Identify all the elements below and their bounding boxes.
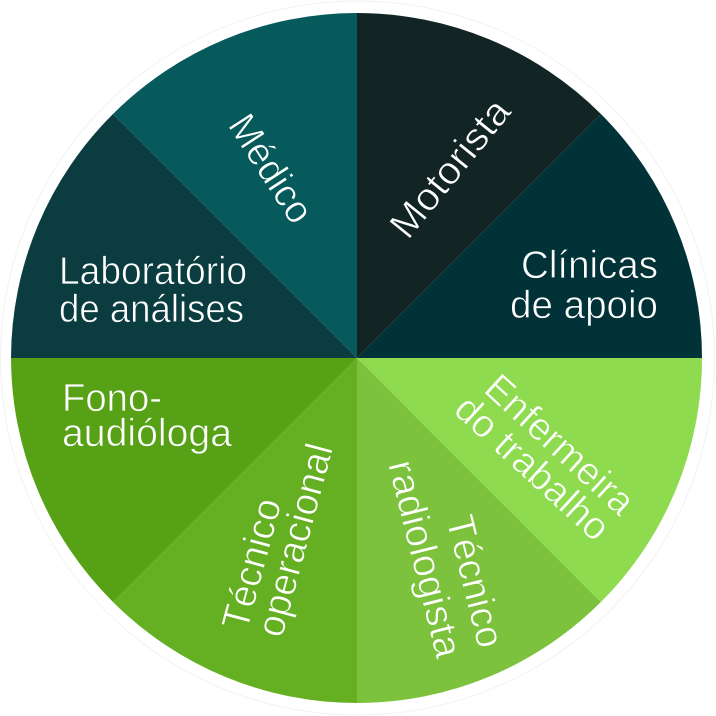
segment: Clínicas de apoio: de apoio	[510, 284, 658, 327]
segment: Técnico operacional: Técnico	[214, 494, 290, 634]
segment: Técnico radiologista	[357, 358, 601, 703]
segment: Motorista: Motorista	[382, 90, 520, 247]
segment: Enfermeira do trabalho: do trabalho	[446, 387, 618, 550]
segment: Laboratório de análises: Laboratório	[59, 250, 247, 293]
segment: Clínicas de apoio: Clínicas	[521, 244, 658, 287]
segment: Clínicas de apoio	[357, 114, 702, 358]
segment: Enfermeira do trabalho	[357, 358, 702, 602]
segment: Fonoaudióloga: audióloga	[62, 412, 232, 455]
segment: Técnico operacional: operacional	[249, 439, 342, 641]
segment: Fonoaudióloga: Fono-	[62, 377, 162, 420]
segment: Motorista	[357, 13, 601, 358]
segment: Laboratório de análises	[11, 114, 357, 358]
segment: Técnico operacional	[113, 358, 357, 703]
segment: Técnico radiologista: radiologista	[379, 456, 470, 662]
segment: Médico: Médico	[219, 106, 321, 231]
segment: Enfermeira do trabalho: Enfermeira	[476, 366, 643, 524]
segment: Fonoaudióloga	[11, 358, 357, 602]
segment: Técnico radiologista: Técnico	[437, 511, 512, 652]
segment: Médico	[113, 13, 357, 358]
segment: Laboratório de análises: de análises	[59, 288, 244, 331]
